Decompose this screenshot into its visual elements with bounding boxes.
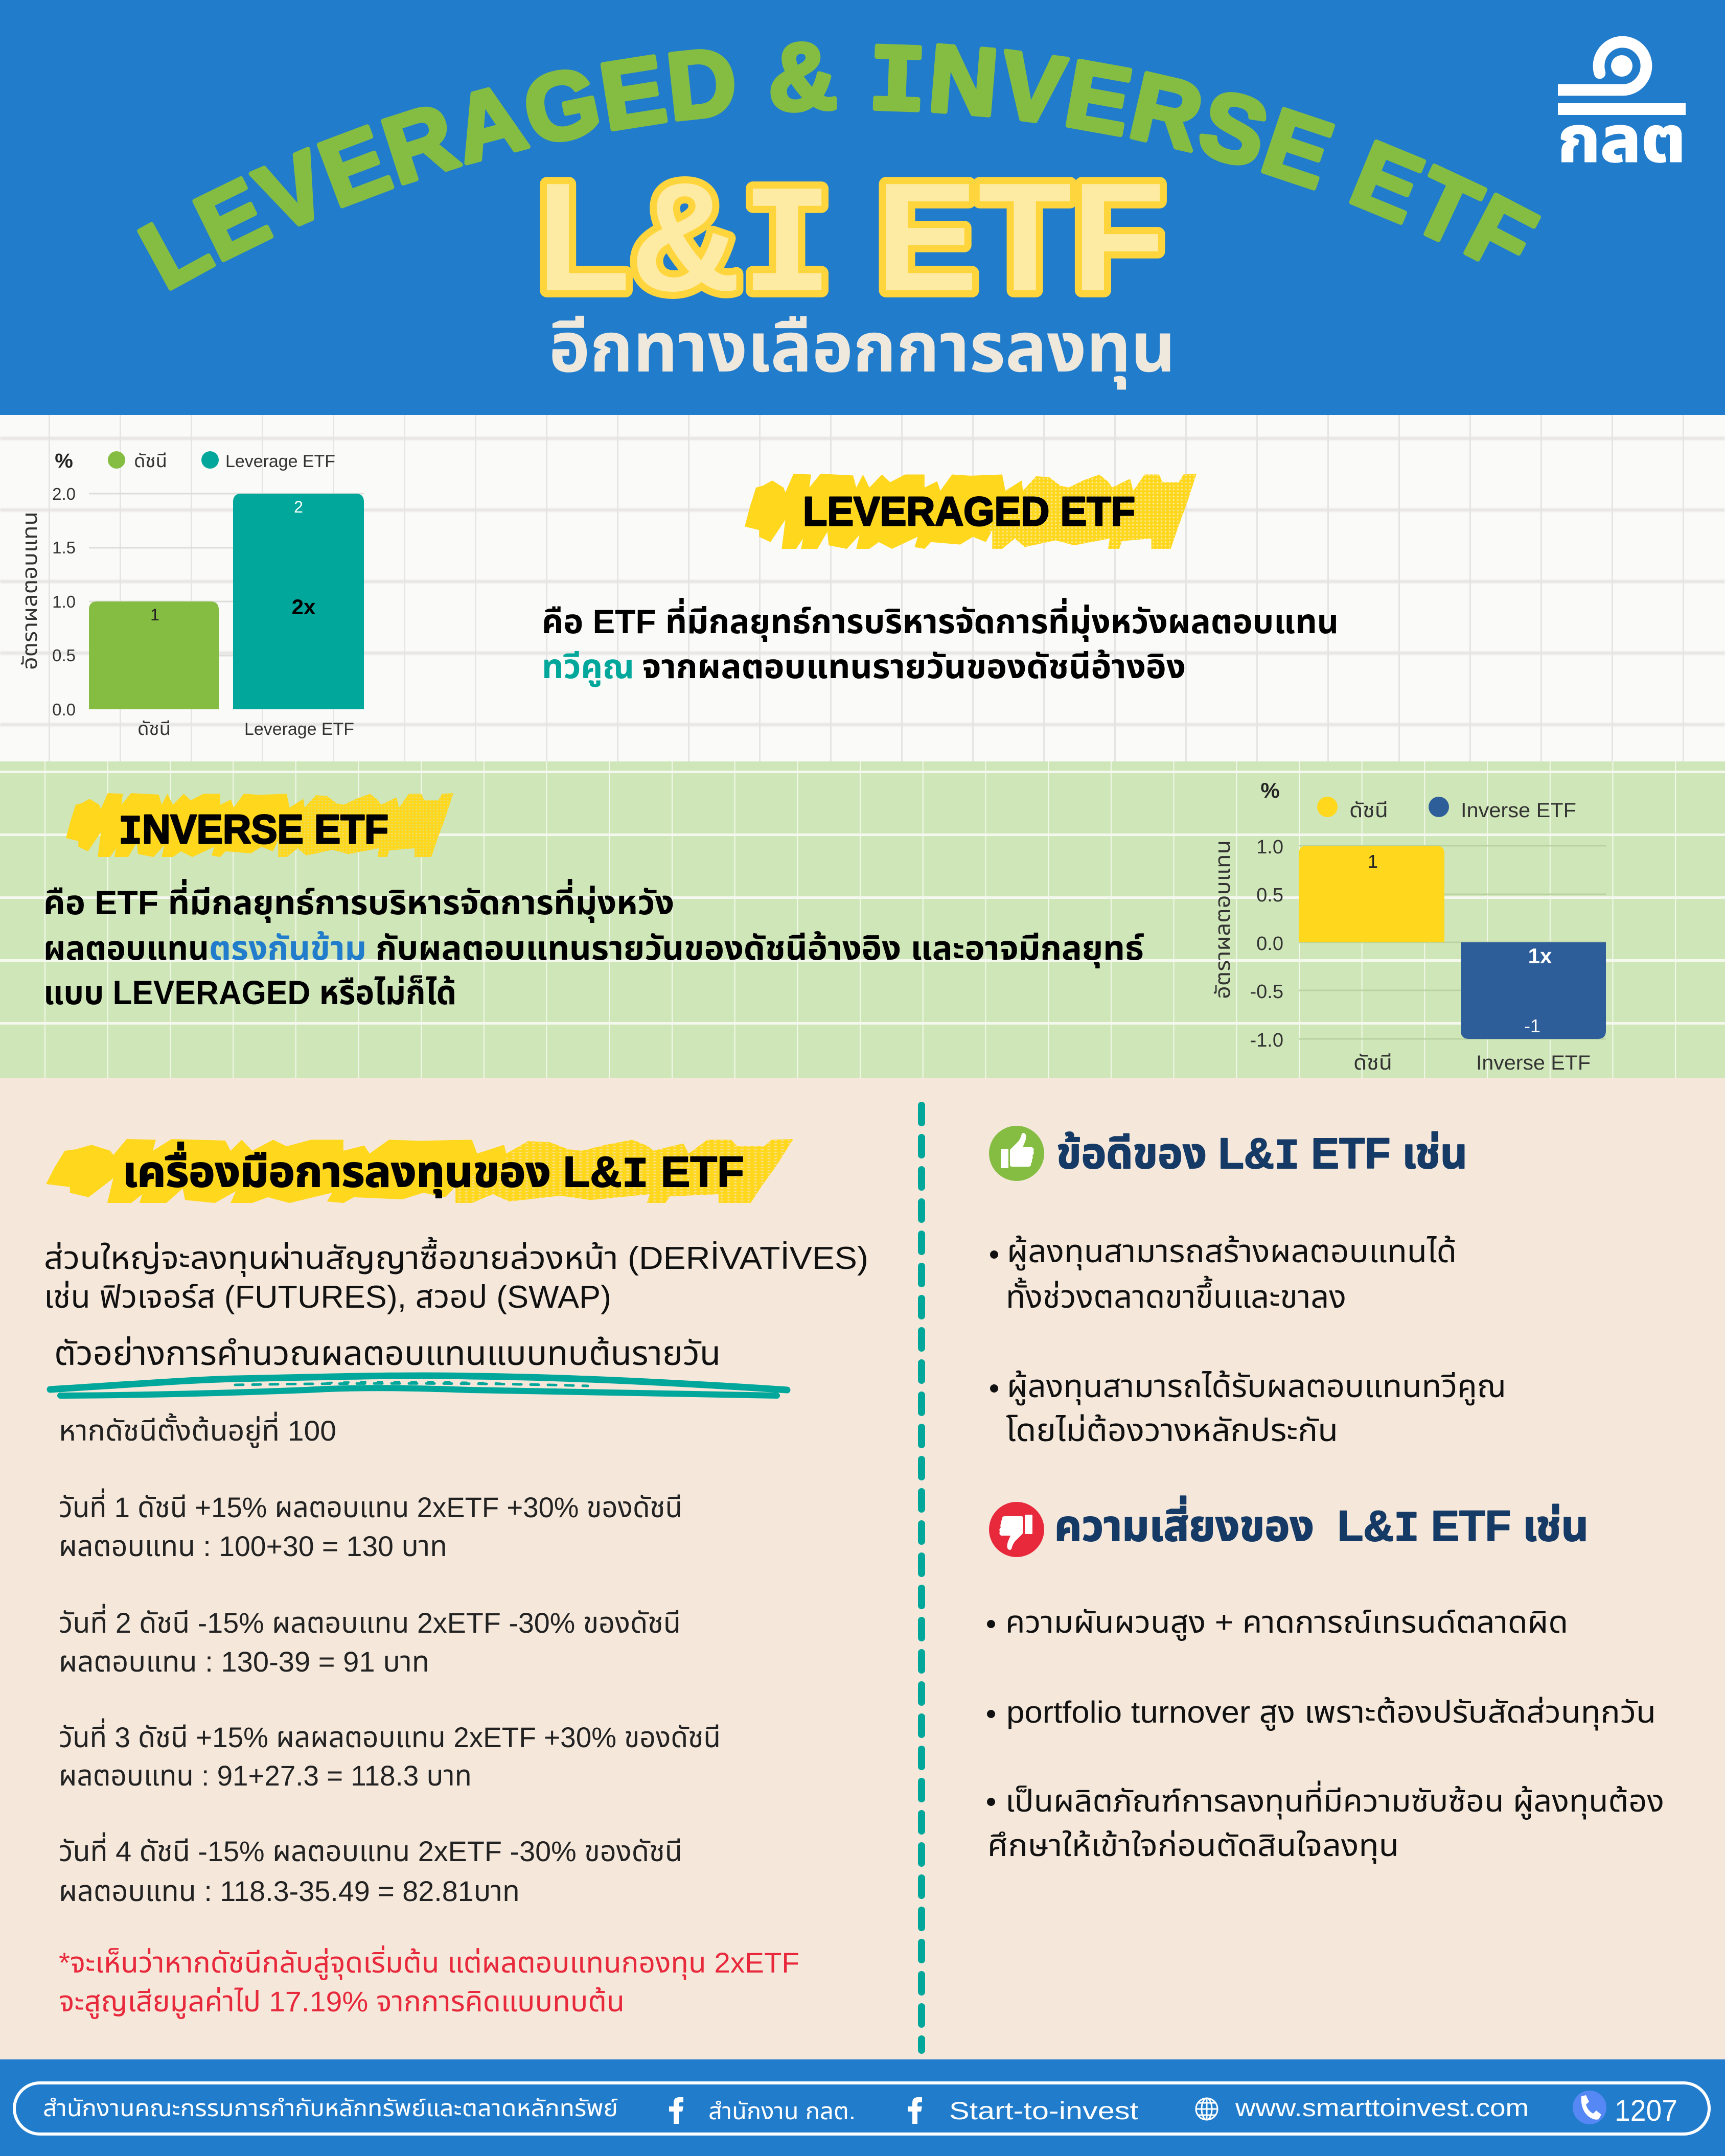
heading: risks: ความเสี่ยงของ L&I ETF เช่น [1054, 1496, 1589, 1554]
header band [0, 0, 1725, 415]
logo: SEC Thailand: กลต [1558, 104, 1686, 175]
curved title: LEVERAGED & INVERSE ETF: LEVERAGED & INVERSE ETF [137, 41, 1541, 291]
bar chart: leverage: 1.0 [52, 592, 76, 611]
text: worked example: ผลตอบแทน : 100+30 = 130 บาท [59, 1530, 447, 1562]
panel: advantages [989, 1126, 1506, 1448]
heading: inverse ETF: INVERSE ETF [119, 806, 388, 856]
bar chart: leverage [19, 450, 364, 739]
bar chart: leverage: Leverage ETF [225, 452, 335, 471]
bar chart: leverage: 0.5 [52, 646, 76, 665]
text: organisation name: สำนักงานคณะกรรมการกำกับหลักทรัพย์และตลาดหลักทรัพย์ [43, 2095, 618, 2121]
bar chart: inverse: ดัชนี [1353, 1052, 1392, 1074]
text: worked example: วันที่ 1 ดัชนี +15% ผลตอบแทน 2xETF +30% ของดัชนี [59, 1488, 682, 1523]
bar chart: inverse: 0.5 [1256, 885, 1283, 906]
bar chart: leverage: Leverage ETF [244, 720, 354, 739]
panel: inverse ETF [0, 761, 1725, 1078]
bar chart: leverage: 1 [150, 606, 159, 624]
subheading: calculation example: ตัวอย่างการคำนวณผลตอบแทนแบบทบต้นรายวัน [54, 1334, 721, 1372]
bar chart: leverage: 2x [292, 595, 316, 619]
text: instruments description [44, 1237, 868, 1315]
main title: L&I ETF: L&I ETF [537, 151, 1165, 337]
heading: instruments: เครื่องมือการลงทุนของ L& I ETF [123, 1142, 744, 1200]
list: advantages: ทั้งช่วงตลาดขาขึ้นและขาลง [1006, 1276, 1346, 1315]
icon: phone [1573, 2091, 1606, 2124]
bar chart: inverse [1212, 778, 1606, 1074]
list: advantages: ผู้ลงทุนสามารถได้รับผลตอบแทนทวีคูณ [1007, 1369, 1506, 1406]
bar chart: leverage: ดัชนี [134, 450, 167, 471]
text: red note: *จะเห็นว่าหากดัชนีกลับสู่จุดเริ่มต้น แต่ผลตอบแทนกองทุน 2xETF [59, 1945, 799, 1980]
text: worked example: ผลตอบแทน : 118.3-35.49 = 82.81บาท [59, 1875, 520, 1907]
bar chart: inverse: 0.0 [1256, 933, 1283, 955]
panel: risks [987, 1496, 1664, 1864]
bar chart: inverse: 1 [1368, 851, 1378, 872]
text: inverse description: กับผลตอบแทนรายวันของดัชนีอ้างอิง และอาจมีกลยุทธ์ [376, 929, 1144, 968]
text: worked example [59, 1411, 721, 1907]
bar chart: inverse: 1.0 [1256, 837, 1283, 858]
bar chart: inverse: อัตราผลตอบแทน [1212, 840, 1234, 999]
text: inverse description: คือ ETF ที่มีกลยุทธ์การบริหารจัดการที่มุ่งหวัง [43, 879, 674, 923]
text: leveraged description: ทวีคูณ [542, 647, 634, 687]
bar chart: inverse: 1x [1528, 944, 1552, 968]
icon: thumbs down [989, 1502, 1044, 1557]
panel: leveraged ETF [0, 415, 1725, 761]
list: risks: portfolio turnover สูง เพราะต้องปรับสัดส่วนทุกวัน [1006, 1695, 1656, 1731]
text: worked example: หากดัชนีตั้งต้นอยู่ที่ 100 [59, 1411, 336, 1448]
text: facebook page start-to-invest: Start-to-invest [949, 2098, 1138, 2125]
text: leveraged description: คือ ETF ที่มีกลยุทธ์การบริหารจัดการที่มุ่งหวังผลตอบแทน [542, 598, 1339, 642]
text: website: www.smarttoinvest.com [1235, 2095, 1529, 2122]
bar chart: leverage: 2.0 [52, 484, 76, 503]
bar chart: leverage: อัตราผลตอบแทน [19, 512, 41, 670]
text: inverse description: ตรงกันข้าม [209, 929, 366, 967]
icon: facebook [908, 2097, 922, 2124]
bar chart: inverse: -1 [1524, 1015, 1540, 1036]
list: risks: ศึกษาให้เข้าใจก่อนตัดสินใจลงทุน [987, 1828, 1399, 1864]
text: worked example: ผลตอบแทน : 91+27.3 = 118.3 บาท [59, 1759, 472, 1792]
heading: leveraged ETF: LEVERAGED ETF [803, 489, 1135, 534]
text: instruments description: ส่วนใหญ่จะลงทุนผ่านสัญญาซื้อขายล่วงหน้า (DERİVATİVES) [44, 1237, 868, 1277]
text: leveraged description [542, 598, 1339, 687]
bar chart: inverse: -1.0 [1250, 1030, 1283, 1051]
text: worked example: วันที่ 4 ดัชนี -15% ผลตอบแทน 2xETF -30% ของดัชนี [59, 1832, 682, 1867]
text: worked example: ผลตอบแทน : 130-39 = 91 บาท [59, 1645, 429, 1678]
bar chart: inverse: Inverse ETF [1461, 799, 1576, 822]
heading: advantages: ข้อดีของ L&I ETF เช่น [1056, 1129, 1467, 1181]
list: risks: ความผันผวนสูง + คาดการณ์เทรนด์ตลาดผิด [1005, 1605, 1568, 1641]
icon: facebook [669, 2097, 683, 2124]
text: hotline: 1207 [1615, 2094, 1677, 2127]
heading: leveraged ETF [745, 474, 1197, 549]
text: red note: จะสูญเสียมูลค่าไป 17.19% จากการคิดแบบทบต้น [59, 1985, 625, 2019]
scribble underline [50, 1376, 787, 1396]
bar chart: inverse: % [1260, 778, 1280, 802]
text: facebook page SEC: สำนักงาน กลต. [708, 2098, 856, 2124]
list: advantages: ผู้ลงทุนสามารถสร้างผลตอบแทนได้ [1007, 1234, 1457, 1271]
bar chart: inverse: Inverse ETF [1476, 1052, 1591, 1074]
icon: thumbs up [989, 1126, 1044, 1181]
panel: L&I ETF instruments [44, 1139, 868, 2019]
list: advantages [990, 1234, 1506, 1448]
bar chart: leverage: ดัชนี [137, 718, 171, 739]
dashed divider [918, 1105, 925, 2050]
panel: details background [0, 1078, 1725, 2059]
bar chart: inverse: ดัชนี [1349, 799, 1388, 822]
text: worked example: วันที่ 3 ดัชนี +15% ผลผลตอบแทน 2xETF +30% ของดัชนี [59, 1718, 721, 1753]
heading: instruments [46, 1139, 793, 1203]
list: advantages: โดยไม่ต้องวางหลักประกัน [1006, 1413, 1338, 1448]
text: instruments description: เช่น ฟิวเจอร์ส (FUTURES), สวอป (SWAP) [44, 1280, 611, 1315]
bar chart: leverage: 1.5 [52, 538, 76, 557]
text: worked example: วันที่ 2 ดัชนี -15% ผลตอบแทน 2xETF -30% ของดัชนี [59, 1604, 681, 1639]
text: leveraged description: จากผลตอบแทนรายวันของดัชนีอ้างอิง [642, 647, 1186, 685]
bar chart: leverage: % [55, 450, 73, 472]
subtitle: อีกทางเลือกการลงทุน [549, 309, 1176, 389]
footer band [0, 2059, 1725, 2156]
bar chart: leverage: 0.0 [52, 700, 76, 719]
heading: inverse ETF [66, 793, 453, 857]
text: inverse description [43, 879, 1144, 1011]
bar chart: inverse: -0.5 [1250, 981, 1283, 1003]
list: risks [987, 1605, 1664, 1864]
text: red note [59, 1945, 799, 2019]
text: inverse description: ผลตอบแทน [43, 929, 209, 967]
list: risks: เป็นผลิตภัณฑ์การลงทุนที่มีความซับซ้อน ผู้ลงทุนต้อง [1005, 1780, 1664, 1820]
logo: SEC Thailand [1558, 42, 1686, 175]
bar chart: leverage: 2 [294, 498, 303, 516]
icon: globe [1196, 2098, 1217, 2120]
text: inverse description: แบบ LEVERAGED หรือไม่ก็ได้ [43, 973, 456, 1011]
